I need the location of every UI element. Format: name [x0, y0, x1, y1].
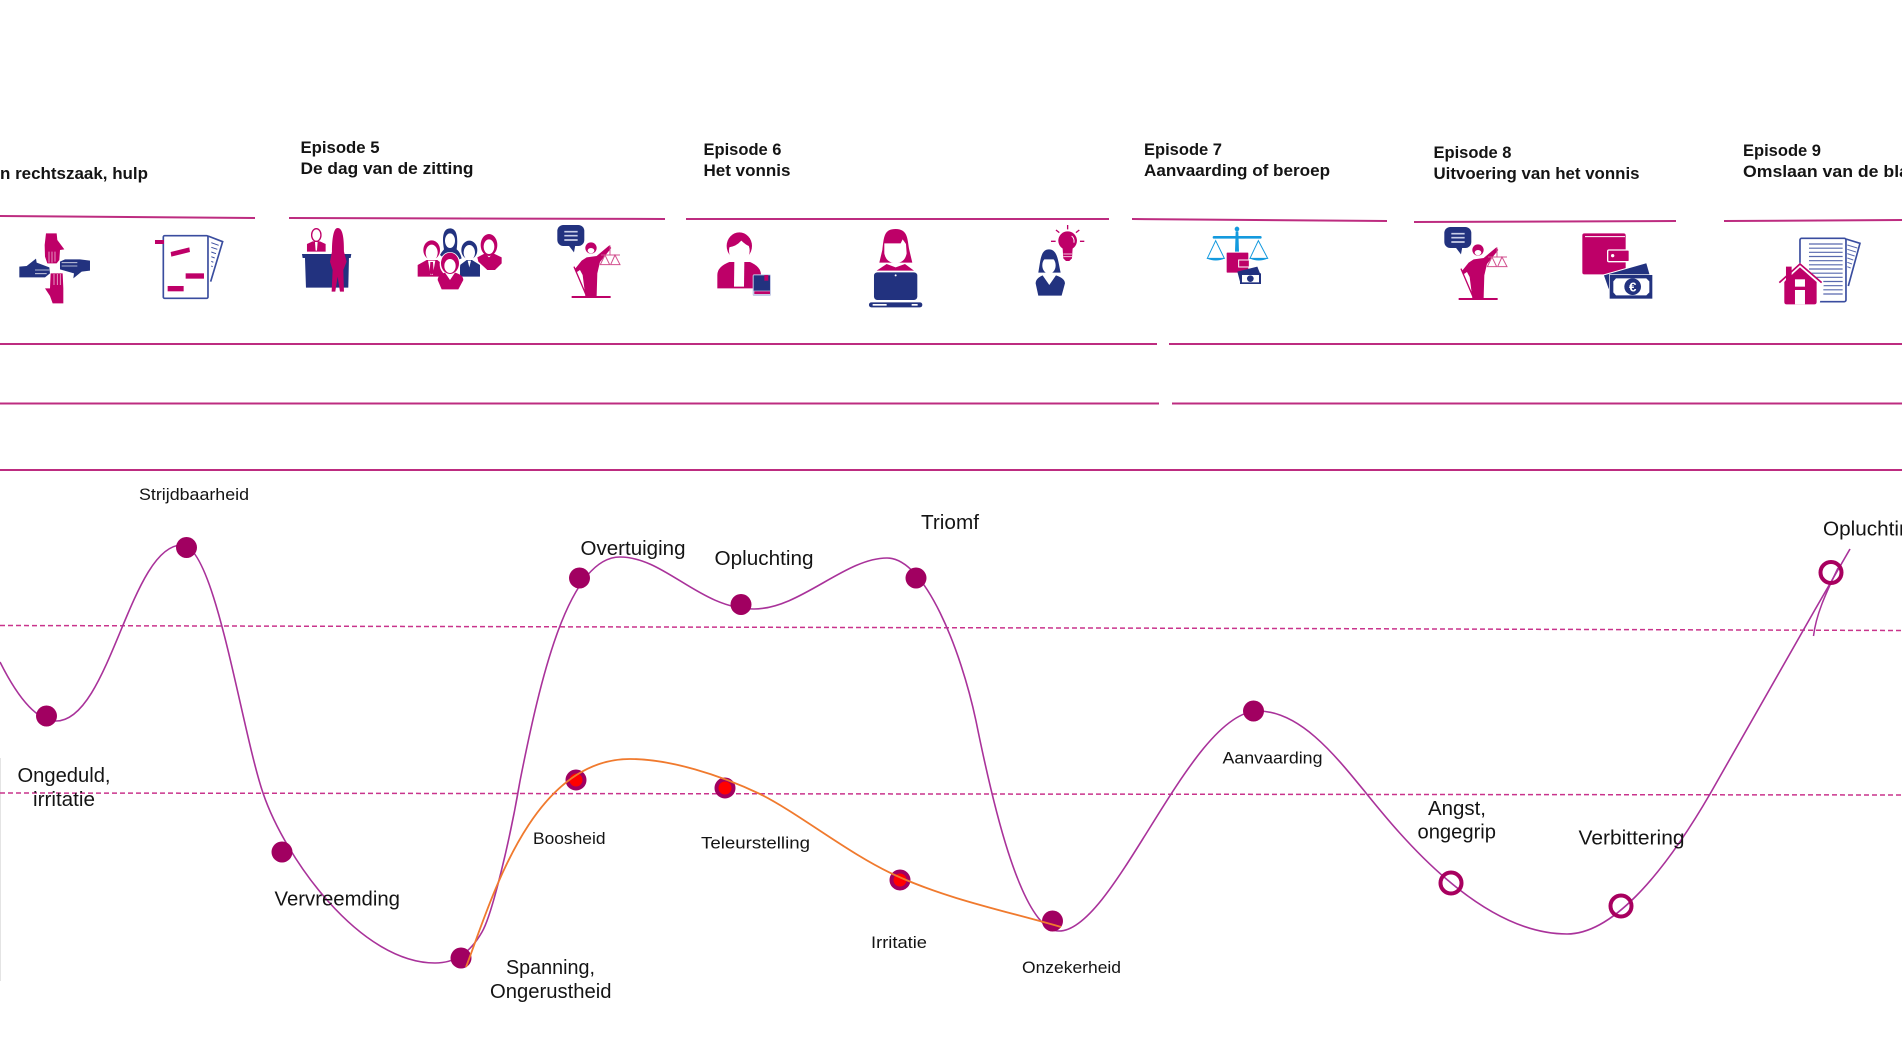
episode 8 heading: [1434, 143, 1640, 183]
icon: woman with light bulb idea: [1036, 225, 1084, 296]
episode 8 heading: Episode 8: [1434, 143, 1512, 162]
icon: house with document: [1777, 238, 1860, 305]
label: Ongeduld, irritatie: Ongeduld,: [18, 765, 110, 787]
label: Angst, ongegrip: [1418, 798, 1496, 844]
label: Boosheid: Boosheid: [533, 829, 606, 848]
icon: judge at bench and woman standing: [302, 228, 351, 292]
faint axis at left edge: [0, 758, 1, 981]
icon: four hands: [19, 233, 90, 303]
label: Vervreemding: Vervreemding: [274, 888, 400, 910]
main path markers: [36, 537, 1264, 968]
icon: scales with wallet and banknotes: [1207, 227, 1268, 284]
label: Spanning, Ongerustheid: [490, 957, 612, 1003]
label: Triomf: Triomf: [921, 512, 979, 534]
label: Ongeduld, irritatie: irritatie: [33, 789, 95, 811]
icon: lady justice with speech bubble, episode 5: [557, 225, 620, 298]
open markers: [1440, 562, 1842, 916]
episode 4 heading: n rechtszaak, hulp: [0, 164, 148, 183]
label: Overtuiging: Overtuiging: [580, 538, 686, 560]
icon: wallet with euro banknotes: €: [1629, 279, 1637, 294]
icon: woman with laptop: [869, 229, 922, 307]
label: Angst, ongegrip: Angst,: [1428, 798, 1486, 820]
episode 7 heading: [1144, 140, 1330, 180]
label: Opluchting: Opluchting: [714, 548, 814, 570]
emotion curve: main path: [0, 545, 1850, 963]
episode 5 heading: [300, 138, 474, 178]
episode 9 heading: [1743, 141, 1902, 181]
label: Teleurstelling: Teleurstelling: [701, 834, 810, 852]
label: Aanvaarding: Aanvaarding: [1222, 748, 1322, 768]
icon: document with marked passages: [155, 236, 223, 298]
label: Irritatie: Irritatie: [871, 933, 927, 952]
label: Verbittering: Verbittering: [1578, 828, 1684, 850]
episode 5 heading: De dag van de zitting: [300, 159, 474, 178]
episode 6 heading: [704, 140, 790, 180]
episode 5 heading: Episode 5: [300, 138, 380, 157]
label: Ongeduld, irritatie: [18, 765, 110, 811]
episode 9 heading: Episode 9: [1743, 141, 1821, 160]
emotion curve: short branch near end: [1814, 568, 1838, 636]
icon: judge with law book: [717, 232, 771, 296]
episode 6 heading: Episode 6: [704, 140, 782, 159]
label: Spanning, Ongerustheid: Ongerustheid: [490, 981, 612, 1003]
episode 7 heading: Episode 7: [1144, 140, 1222, 159]
icon: group of five people: [418, 228, 502, 289]
episode 8 heading: Uitvoering van het vonnis: [1434, 164, 1640, 183]
label: Strijdbaarheid: Strijdbaarheid: [139, 485, 249, 504]
icon: lady justice with speech bubble, episode 8: [1444, 227, 1507, 300]
episode 7 heading: Aanvaarding of beroep: [1144, 161, 1330, 180]
label: Angst, ongegrip: ongegrip: [1418, 822, 1496, 844]
red markers on orange path: [568, 772, 908, 888]
label: Onzekerheid: Onzekerheid: [1022, 958, 1121, 977]
icon: wallet with euro banknotes: [1582, 233, 1653, 299]
label: Spanning, Ongerustheid: Spanning,: [506, 957, 595, 979]
emotion curve: alternative orange path: [466, 759, 1061, 967]
episode 6 heading: Het vonnis: [704, 161, 790, 180]
